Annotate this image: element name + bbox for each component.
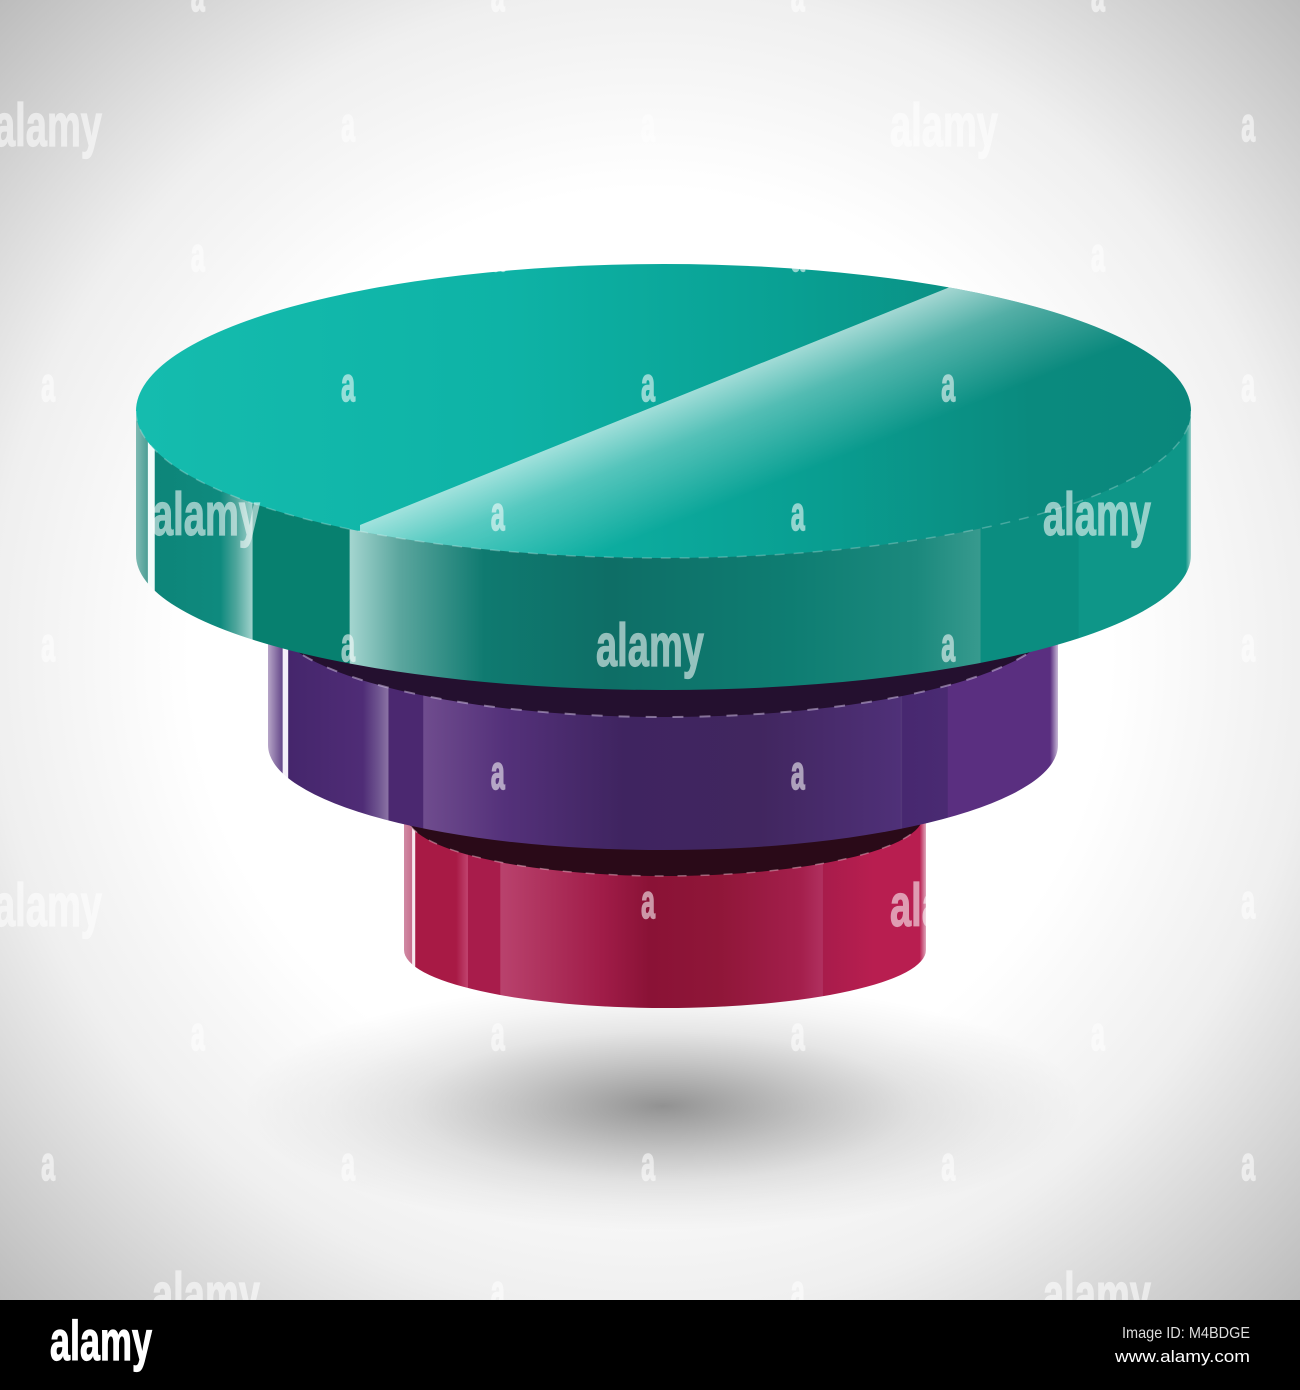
watermark logos: alamy bbox=[596, 612, 704, 679]
watermark letter marks: aaaa bbox=[41, 618, 1256, 672]
watermark letter marks: aaaaa bbox=[41, 1137, 1256, 1191]
watermark letter marks: aa bbox=[491, 1265, 805, 1319]
watermark letter marks: aaaa bbox=[191, 746, 1105, 800]
watermark letter marks: aaaaa bbox=[41, 358, 1256, 412]
watermark letter marks: aaa bbox=[341, 875, 1256, 929]
watermark letter marks: aaa bbox=[341, 98, 1256, 152]
footer logo: alamy bbox=[50, 1309, 152, 1372]
teal top disc bbox=[136, 264, 1191, 690]
teal disc side wall bbox=[136, 411, 1191, 690]
watermark logos: alamy bbox=[890, 872, 998, 939]
watermark logos: alamy bbox=[890, 92, 998, 159]
image id: Image ID: M4BDGE bbox=[1122, 1325, 1250, 1342]
watermark logos: alamy bbox=[1043, 481, 1151, 548]
watermark letter marks: aaaa bbox=[191, 1007, 1105, 1061]
purple middle disc bbox=[268, 511, 1058, 850]
watermark logos: alamy bbox=[152, 481, 260, 548]
watermark logos bbox=[0, 92, 1151, 1328]
watermark logos: alamy bbox=[152, 1261, 260, 1328]
watermark logos: alamy bbox=[1043, 1261, 1151, 1328]
website: www.alamy.com bbox=[1114, 1347, 1250, 1366]
floor shadow bbox=[243, 981, 1083, 1231]
crimson bottom disc bbox=[404, 756, 926, 1008]
diagonal gloss highlight bbox=[360, 288, 1118, 555]
teal disc top face bbox=[136, 264, 1191, 558]
footer bar bbox=[0, 1300, 1300, 1390]
watermark letter marks: aaaa bbox=[191, 228, 1105, 282]
watermark letter marks: aa bbox=[491, 487, 805, 541]
rim highlight bbox=[136, 411, 1191, 558]
